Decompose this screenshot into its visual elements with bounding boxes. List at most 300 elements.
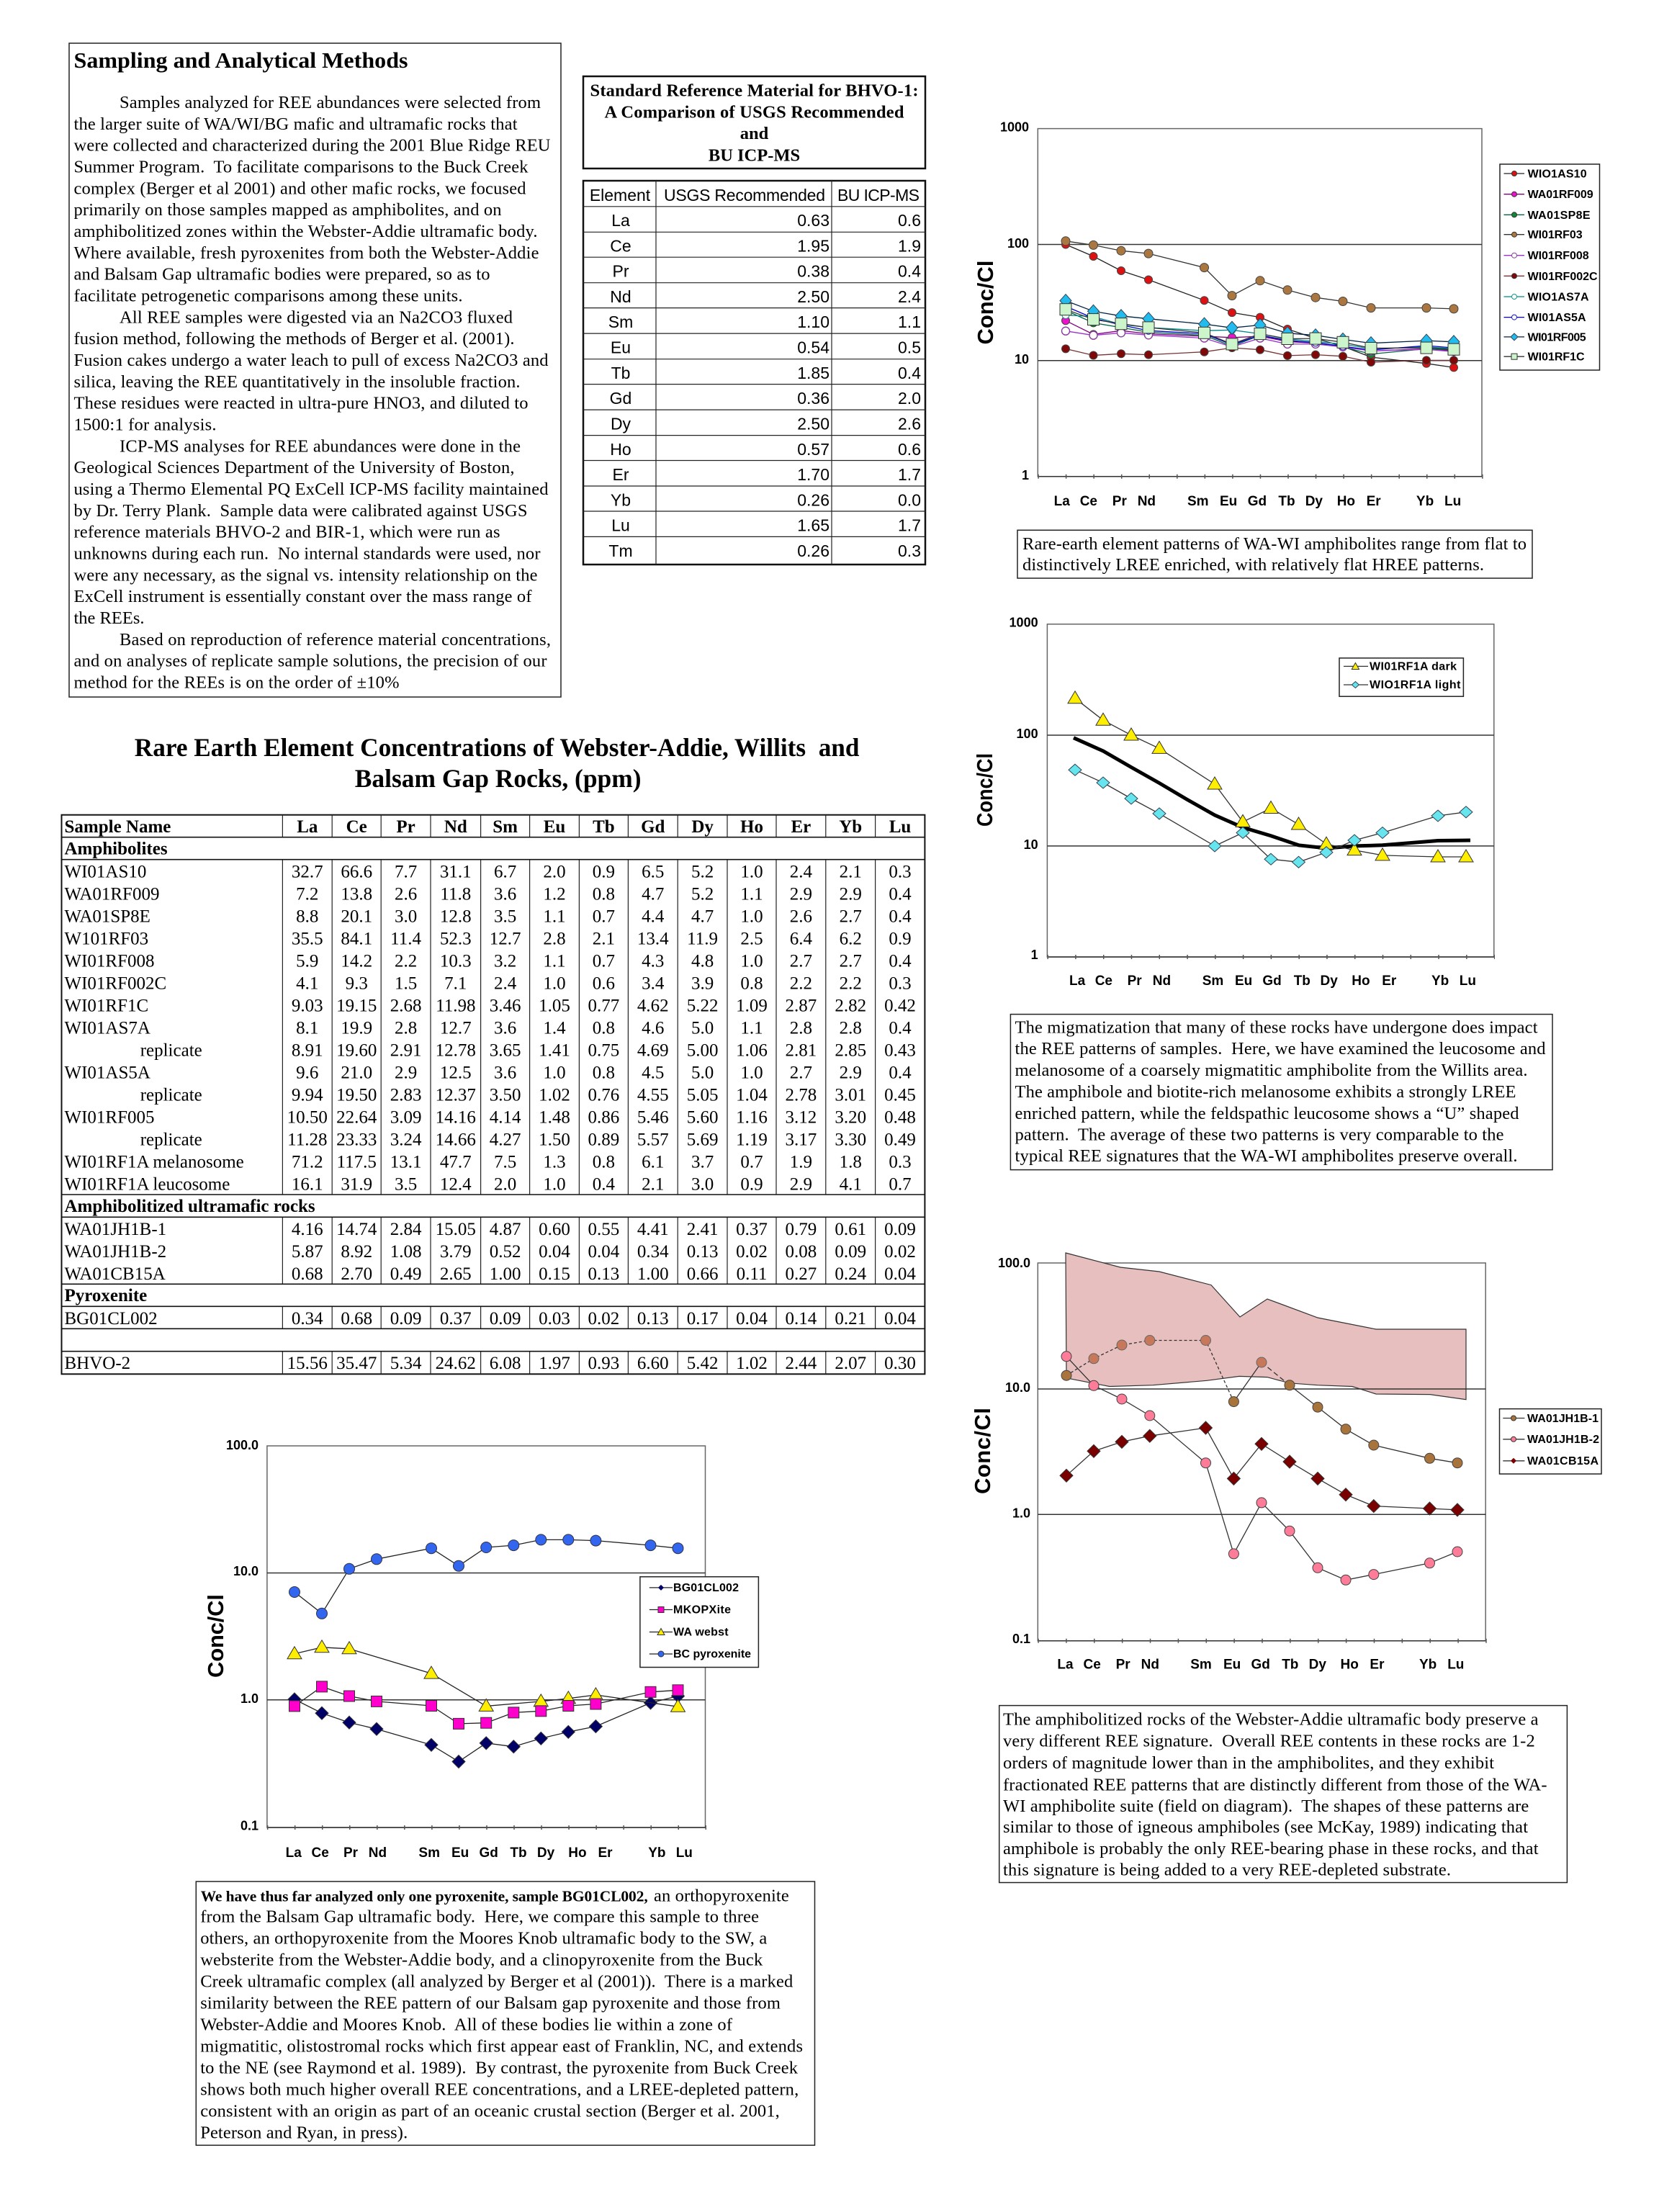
legend: pyroxenite samples: BG01CL002 bbox=[673, 1582, 739, 1594]
section: amphibolites: WI01RF1A melanosome bbox=[65, 1152, 244, 1172]
text block: methods description: Where available, fresh pyroxenites from both the Webster-Addie bbox=[73, 243, 539, 263]
section: amphibolites: 2.9 bbox=[840, 1063, 862, 1082]
section: amphibolitized ultramafic rocks: 0.55 bbox=[588, 1220, 619, 1239]
section: amphibolites: 0.76 bbox=[588, 1085, 619, 1105]
x axis element labels: Pr bbox=[1116, 1658, 1130, 1672]
section: amphibolites: WI01AS5A bbox=[65, 1063, 150, 1082]
y axis values: 1.0 bbox=[240, 1691, 258, 1706]
section: amphibolitized ultramafic rocks: 0.04 bbox=[588, 1242, 620, 1262]
text block: methods description: and Balsam Gap ultramafic bodies were prepared, so as to bbox=[73, 265, 490, 284]
section: amphibolitized ultramafic rocks: 0.13 bbox=[687, 1242, 718, 1262]
text block: methods description bbox=[73, 93, 551, 692]
section: amphibolites: replicate bbox=[140, 1085, 202, 1105]
series: BG01CL002 bbox=[295, 1696, 678, 1761]
section: amphibolites: 5.9 bbox=[296, 951, 318, 971]
section: amphibolites: 3.50 bbox=[490, 1085, 521, 1105]
section: amphibolites: 5.57 bbox=[637, 1130, 669, 1149]
section: amphibolites: 5.2 bbox=[691, 862, 714, 881]
heading: sampling and analytical methods: Sampling and Analytical Methods bbox=[73, 48, 408, 73]
section: amphibolites: replicate bbox=[140, 1130, 202, 1149]
section: amphibolites: 0.45 bbox=[884, 1085, 916, 1105]
section: amphibolites: 4.55 bbox=[637, 1085, 669, 1105]
section: amphibolites: 7.5 bbox=[494, 1152, 516, 1172]
section: amphibolites: 3.2 bbox=[494, 951, 516, 971]
series: WA01JH1B-2 bbox=[1066, 1357, 1457, 1580]
table: USGS recommended vs BU ICP-MS: 1.65 bbox=[797, 516, 830, 534]
section: amphibolites: 0.4 bbox=[889, 1018, 912, 1038]
caption: migmatization effect: typical REE signatures that the WA-WI amphibolites preserve overall. bbox=[1015, 1146, 1518, 1166]
section: amphibolites: 2.0 bbox=[494, 1174, 516, 1194]
section: amphibolitized ultramafic rocks: 0.02 bbox=[736, 1242, 768, 1262]
table: USGS recommended vs BU ICP-MS: 2.50 bbox=[797, 415, 830, 433]
section: amphibolites: 2.9 bbox=[840, 884, 862, 904]
section: amphibolites: 5.05 bbox=[687, 1085, 718, 1105]
section: amphibolitized ultramafic rocks bbox=[65, 1197, 916, 1284]
section: amphibolites: 0.4 bbox=[889, 951, 912, 971]
section: amphibolites: 14.2 bbox=[341, 951, 372, 971]
section: amphibolites: 3.5 bbox=[395, 1174, 417, 1194]
x axis element labels: Ce bbox=[311, 1845, 329, 1861]
text block: methods description: fusion method, following the methods of Berger et al. (2001). bbox=[73, 329, 514, 349]
section: pyroxenite: 0.04 bbox=[884, 1309, 916, 1328]
section: amphibolitized ultramafic rocks: 8.92 bbox=[341, 1242, 372, 1262]
x axis element labels: Er bbox=[598, 1845, 613, 1861]
table: USGS recommended vs BU ICP-MS: Dy bbox=[611, 415, 631, 433]
section: amphibolitized ultramafic rocks: 0.09 bbox=[884, 1220, 916, 1239]
chart: migmatite melanosome and leucosome bbox=[972, 615, 1495, 989]
x axis element labels: Gd bbox=[1248, 494, 1267, 509]
text block: methods description: were collected and characterized during the 2001 Blue Ridge REU bbox=[73, 136, 551, 156]
section: amphibolites: 13.4 bbox=[637, 929, 669, 948]
table: USGS recommended vs BU ICP-MS: 1.70 bbox=[797, 465, 830, 484]
section: amphibolites: 0.7 bbox=[740, 1152, 763, 1172]
x axis element labels: Lu bbox=[1447, 1658, 1464, 1672]
section: pyroxenite: 0.13 bbox=[637, 1309, 669, 1328]
section: amphibolites: 32.7 bbox=[292, 862, 323, 881]
section: amphibolites: 0.8 bbox=[593, 1063, 615, 1082]
section: amphibolites: 66.6 bbox=[341, 862, 372, 881]
section: amphibolites: 2.85 bbox=[835, 1040, 866, 1060]
section: amphibolites: 0.43 bbox=[884, 1040, 916, 1060]
section: amphibolites: 2.91 bbox=[390, 1040, 421, 1060]
table: USGS recommended vs BU ICP-MS: Tm bbox=[608, 541, 633, 560]
section: amphibolites: 3.7 bbox=[691, 1152, 714, 1172]
section: amphibolites: 5.2 bbox=[691, 884, 714, 904]
x axis element labels: Ho bbox=[1337, 494, 1355, 509]
section: amphibolites: 19.60 bbox=[336, 1040, 377, 1060]
text block: methods description: and on analyses of replicate sample solutions, the precision of our bbox=[73, 652, 547, 671]
table: USGS recommended vs BU ICP-MS: BU ICP-MS bbox=[837, 186, 920, 204]
caption: pyroxenite analysis: Webster-Addie and Moores Knob. All of these bodies lie within a zone of bbox=[200, 2015, 733, 2034]
text block: methods description: complex (Berger et al 2001) and other mafic rocks, we focused bbox=[73, 179, 526, 198]
caption: pyroxenite analysis: others, an orthopyroxenite from the Moores Knob ultramafic body to the SW, a bbox=[200, 1928, 767, 1948]
table: USGS recommended vs BU ICP-MS: 2.6 bbox=[898, 415, 921, 433]
text block: methods description: Fusion cakes undergo a water leach to pull of excess Na2CO3 and bbox=[73, 351, 549, 370]
x axis element labels: Ho bbox=[568, 1845, 587, 1861]
section: amphibolites: 0.86 bbox=[588, 1107, 619, 1127]
section: pyroxenite bbox=[65, 1286, 916, 1328]
x axis element labels: Lu bbox=[1460, 974, 1476, 989]
y axis values: 10.0 bbox=[1005, 1380, 1030, 1395]
y axis label: Conc/Cl bbox=[970, 1408, 995, 1494]
section: amphibolites: 4.3 bbox=[642, 951, 664, 971]
section: pyroxenite: 0.34 bbox=[292, 1309, 323, 1328]
table: USGS recommended vs BU ICP-MS: 0.6 bbox=[898, 211, 921, 230]
caption: pyroxenite analysis: We have thus far analyzed only one pyroxenite, sample BG01CL002, bbox=[201, 1887, 648, 1905]
section: amphibolites: 4.62 bbox=[637, 996, 669, 1015]
section: amphibolites: 1.0 bbox=[543, 974, 566, 993]
table: USGS recommended vs BU ICP-MS: 0.0 bbox=[898, 491, 921, 510]
section: amphibolites: 0.7 bbox=[889, 1174, 912, 1194]
section: amphibolites: 2.1 bbox=[593, 929, 615, 948]
legend: amphibolite samples: WI01RF005 bbox=[1528, 331, 1586, 344]
section: amphibolites: 2.83 bbox=[390, 1085, 421, 1105]
legend: amphibolite samples: WIO1AS10 bbox=[1528, 168, 1587, 180]
section: amphibolites: 13.8 bbox=[341, 884, 372, 904]
table header row: Lu bbox=[889, 817, 911, 837]
section: amphibolites: 0.7 bbox=[593, 907, 615, 926]
caption: pyroxenite analysis: consistent with an origin as part of an oceanic crustal section (Berger et al. 2001, bbox=[200, 2101, 780, 2121]
section: amphibolites: 0.9 bbox=[740, 1174, 763, 1194]
section: amphibolitized ultramafic rocks: 2.65 bbox=[440, 1264, 472, 1284]
y axis values: 1000 bbox=[1010, 615, 1038, 629]
section: amphibolitized ultramafic rocks: Amphibolitized ultramafic rocks bbox=[65, 1197, 315, 1216]
section: amphibolitized ultramafic rocks: 0.09 bbox=[835, 1242, 866, 1262]
section: amphibolites: 1.06 bbox=[736, 1040, 768, 1060]
section: amphibolitized ultramafic rocks: 0.52 bbox=[490, 1242, 521, 1262]
section: amphibolites: 1.50 bbox=[539, 1130, 570, 1149]
row: BHVO-2 standard: 1.02 bbox=[736, 1354, 768, 1373]
caption: amphibolitized rocks bbox=[999, 1706, 1567, 1882]
section: amphibolites: WI01RF002C bbox=[65, 974, 166, 993]
row: BHVO-2 standard: BHVO-2 bbox=[65, 1354, 130, 1373]
panel: standard reference material title: and bbox=[740, 124, 769, 143]
x axis element labels: Sm bbox=[1202, 974, 1223, 989]
section: amphibolites: 12.7 bbox=[440, 1018, 472, 1038]
section: amphibolites: 1.1 bbox=[543, 951, 566, 971]
y axis values: 0.1 bbox=[240, 1819, 258, 1833]
section: amphibolites: 5.0 bbox=[691, 1018, 714, 1038]
table: USGS recommended vs BU ICP-MS: Tb bbox=[611, 364, 630, 382]
section: amphibolites: 19.50 bbox=[336, 1085, 377, 1105]
section: amphibolites: 7.2 bbox=[296, 884, 318, 904]
section: amphibolites: 10.50 bbox=[287, 1107, 328, 1127]
section: amphibolites: 11.8 bbox=[440, 884, 471, 904]
section: amphibolites: 1.0 bbox=[740, 862, 763, 881]
table: USGS recommended vs BU ICP-MS: La bbox=[611, 211, 630, 230]
series: WA01CB15A bbox=[1066, 1428, 1457, 1510]
section: amphibolites: 2.82 bbox=[835, 996, 866, 1015]
section: amphibolites: 3.5 bbox=[494, 907, 516, 926]
section: amphibolites: replicate bbox=[140, 1040, 202, 1060]
section: amphibolites: 3.65 bbox=[490, 1040, 521, 1060]
section: amphibolites: 0.4 bbox=[889, 1063, 912, 1082]
section: amphibolites: 16.1 bbox=[292, 1174, 323, 1194]
section: amphibolites: 6.5 bbox=[642, 862, 664, 881]
series: WI01AS7A bbox=[1066, 315, 1454, 349]
table: USGS recommended vs BU ICP-MS: 1.1 bbox=[898, 313, 921, 331]
legend: amphibolite samples: WI01RF008 bbox=[1528, 250, 1589, 262]
section: amphibolites: WI01RF005 bbox=[65, 1107, 154, 1127]
section: amphibolites: 117.5 bbox=[337, 1152, 377, 1172]
row: BHVO-2 standard: 15.56 bbox=[287, 1354, 328, 1373]
x axis element labels: Lu bbox=[1444, 494, 1461, 509]
x axis element labels: Ce bbox=[1095, 974, 1112, 989]
section: amphibolites: 11.4 bbox=[390, 929, 422, 948]
text block: methods description: Samples analyzed for REE abundances were selected from bbox=[120, 93, 541, 112]
section: amphibolites: 12.37 bbox=[436, 1085, 476, 1105]
section: amphibolites: Amphibolites bbox=[65, 840, 168, 859]
section: amphibolites: 1.41 bbox=[539, 1040, 570, 1060]
section: amphibolites: 8.1 bbox=[296, 1018, 318, 1038]
section: amphibolites: 1.0 bbox=[740, 951, 763, 971]
section: amphibolites: 6.4 bbox=[790, 929, 813, 948]
text block: methods description: using a Thermo Elemental PQ ExCell ICP-MS facility maintained bbox=[73, 480, 549, 499]
table: USGS recommended vs BU ICP-MS: Eu bbox=[611, 338, 631, 357]
panel: standard reference material title: A Comparison of USGS Recommended bbox=[605, 103, 904, 122]
x axis element labels: Er bbox=[1382, 974, 1397, 989]
section: amphibolites: 1.8 bbox=[840, 1152, 862, 1172]
x axis element labels: Eu bbox=[451, 1845, 469, 1861]
legend: amphibolitized samples: WA01CB15A bbox=[1527, 1455, 1599, 1467]
section: amphibolites: 12.8 bbox=[440, 907, 472, 926]
section: amphibolitized ultramafic rocks: 0.68 bbox=[292, 1264, 323, 1284]
section: amphibolites: 31.9 bbox=[341, 1174, 372, 1194]
section: amphibolitized ultramafic rocks: 0.04 bbox=[539, 1242, 570, 1262]
caption: amphibolitized rocks: orders of magnitude lower than in the amphibolites, and they exhibit bbox=[1003, 1753, 1494, 1773]
section: amphibolites: WI01AS10 bbox=[65, 862, 146, 881]
y axis values: 1000 bbox=[1000, 120, 1029, 134]
table: USGS recommended vs BU ICP-MS: 1.10 bbox=[797, 313, 830, 331]
x axis element labels: Gd bbox=[1251, 1658, 1270, 1672]
section: pyroxenite: 0.21 bbox=[835, 1309, 866, 1328]
caption: pyroxenite analysis: Peterson and Ryan, in press). bbox=[200, 2123, 408, 2142]
y axis values: 100 bbox=[1017, 727, 1038, 741]
y axis values: 10 bbox=[1015, 352, 1029, 367]
table: USGS recommended vs BU ICP-MS: Gd bbox=[610, 389, 631, 408]
section: amphibolites: 5.69 bbox=[687, 1130, 718, 1149]
caption: pyroxenite analysis: Creek ultramafic complex (all analyzed by Berger et al (2001)). There is a marked bbox=[200, 1972, 793, 1991]
section: amphibolites: 0.8 bbox=[593, 1152, 615, 1172]
table: USGS recommended vs BU ICP-MS: 0.6 bbox=[898, 440, 921, 459]
table: USGS recommended vs BU ICP-MS: Pr bbox=[612, 262, 629, 281]
section: amphibolites: 12.78 bbox=[436, 1040, 476, 1060]
row: BHVO-2 standard: 5.42 bbox=[687, 1354, 718, 1373]
section: amphibolitized ultramafic rocks: WA01JH1B-2 bbox=[65, 1242, 166, 1262]
caption: pyroxenite analysis bbox=[196, 1881, 815, 2145]
section: amphibolites: 2.2 bbox=[840, 974, 862, 993]
series: WI01RF002C bbox=[1066, 348, 1454, 362]
table header row: Yb bbox=[839, 817, 862, 837]
section: amphibolites: 2.78 bbox=[786, 1085, 817, 1105]
section: amphibolitized ultramafic rocks: 15.05 bbox=[436, 1220, 476, 1239]
table: USGS recommended vs BU ICP-MS: 0.38 bbox=[797, 262, 830, 281]
section: amphibolites: 84.1 bbox=[341, 929, 372, 948]
table: USGS recommended vs BU ICP-MS: 1.7 bbox=[898, 465, 921, 484]
legend: pyroxenite samples: WA webst bbox=[673, 1626, 729, 1639]
section: amphibolites: 0.48 bbox=[884, 1107, 916, 1127]
section: amphibolites: 6.2 bbox=[840, 929, 862, 948]
y axis values bbox=[226, 1438, 258, 1833]
chart: pyroxenite comparison bbox=[203, 1438, 758, 1861]
y axis values: 1 bbox=[1031, 948, 1038, 962]
section: amphibolitized ultramafic rocks: 5.87 bbox=[292, 1242, 323, 1262]
row: BHVO-2 standard: 35.47 bbox=[336, 1354, 377, 1373]
text block: methods description: the larger suite of WA/WI/BG mafic and ultramafic rocks that bbox=[73, 114, 518, 134]
section: amphibolites: 9.03 bbox=[292, 996, 323, 1015]
text block: methods description: method for the REEs is on the order of ±10% bbox=[73, 673, 399, 692]
section: amphibolites: 0.3 bbox=[889, 1152, 912, 1172]
section: amphibolitized ultramafic rocks: 0.49 bbox=[390, 1264, 421, 1284]
text block: methods description: amphibolitized zones within the Webster-Addie ultramafic body. bbox=[73, 222, 537, 241]
x axis element labels: Ce bbox=[1083, 1658, 1101, 1672]
section: amphibolites: WI01RF008 bbox=[65, 951, 154, 971]
table header row: Eu bbox=[544, 817, 565, 837]
section: amphibolites: 2.9 bbox=[790, 884, 812, 904]
section: amphibolites: 11.9 bbox=[687, 929, 718, 948]
section: amphibolites: 1.0 bbox=[543, 1174, 566, 1194]
section: amphibolitized ultramafic rocks: 0.34 bbox=[637, 1242, 669, 1262]
section: amphibolitized ultramafic rocks: 14.74 bbox=[336, 1220, 377, 1239]
section: amphibolites: 0.9 bbox=[593, 862, 615, 881]
section: amphibolites: 5.0 bbox=[691, 1063, 714, 1082]
x axis element labels: Tb bbox=[510, 1845, 527, 1861]
section: amphibolites: 3.12 bbox=[786, 1107, 817, 1127]
section: amphibolitized ultramafic rocks: 2.84 bbox=[390, 1220, 422, 1239]
section: amphibolites: 3.46 bbox=[490, 996, 521, 1015]
section: amphibolites: 0.4 bbox=[889, 907, 912, 926]
series: WA01SP8E bbox=[1066, 310, 1454, 354]
section: amphibolites: 2.4 bbox=[790, 862, 813, 881]
section: amphibolites: 0.4 bbox=[593, 1174, 616, 1194]
section: amphibolites: 8.91 bbox=[292, 1040, 323, 1060]
section: amphibolites: 2.0 bbox=[543, 862, 566, 881]
section: amphibolites: 6.1 bbox=[642, 1152, 664, 1172]
section: amphibolites: 4.69 bbox=[637, 1040, 669, 1060]
text block: methods description: unknowns during each run. No internal standards were used, nor bbox=[73, 544, 540, 563]
section: amphibolites: 1.0 bbox=[740, 907, 763, 926]
caption: pyroxenite analysis: websterite from the Webster-Addie body, and a clinopyroxenite from the Buck bbox=[200, 1950, 763, 1969]
section: amphibolites: 3.24 bbox=[390, 1130, 422, 1149]
series: WA webst bbox=[295, 1647, 678, 1707]
y axis values: 10 bbox=[1024, 837, 1038, 852]
section: amphibolites: 3.6 bbox=[494, 884, 516, 904]
y axis values bbox=[1010, 615, 1038, 962]
text block: methods description: the REEs. bbox=[73, 608, 144, 628]
row: BHVO-2 standard: 5.34 bbox=[390, 1354, 422, 1373]
table: USGS recommended vs BU ICP-MS: Lu bbox=[611, 516, 630, 534]
section: amphibolites: 2.81 bbox=[786, 1040, 817, 1060]
x axis element labels: Dy bbox=[1305, 494, 1323, 509]
section: amphibolites: 47.7 bbox=[440, 1152, 472, 1172]
legend: amphibolite samples: WA01SP8E bbox=[1528, 210, 1591, 222]
legend: amphibolite samples bbox=[1500, 164, 1600, 370]
section: amphibolites: WI01AS7A bbox=[65, 1018, 150, 1038]
text block: methods description: Geological Sciences Department of the University of Boston, bbox=[73, 458, 514, 477]
section: amphibolites: 4.27 bbox=[490, 1130, 521, 1149]
section: amphibolites: 1.02 bbox=[539, 1085, 570, 1105]
x axis element labels: Pr bbox=[343, 1845, 359, 1861]
legend: pyroxenite samples: BC pyroxenite bbox=[673, 1648, 751, 1660]
table: USGS recommended vs BU ICP-MS: 1.9 bbox=[898, 236, 921, 255]
section: amphibolites: 52.3 bbox=[440, 929, 472, 948]
x axis element labels: Yb bbox=[648, 1845, 665, 1861]
x axis element labels: Ho bbox=[1352, 974, 1370, 989]
section: amphibolitized ultramafic rocks: 0.11 bbox=[737, 1264, 767, 1284]
table: USGS recommended vs BU ICP-MS: Ce bbox=[610, 236, 631, 255]
x axis element labels: Er bbox=[1367, 494, 1381, 509]
section: amphibolites: 11.98 bbox=[436, 996, 475, 1015]
x axis element labels: Dy bbox=[537, 1845, 555, 1861]
section: amphibolitized ultramafic rocks: 0.61 bbox=[835, 1220, 866, 1239]
chart: WA-WI amphibolite REE patterns bbox=[973, 120, 1600, 509]
section: amphibolites: 1.09 bbox=[736, 996, 768, 1015]
text block: methods description: were any necessary, as the signal vs. intensity relationship on the bbox=[73, 565, 538, 585]
table: USGS recommended vs BU ICP-MS: 0.57 bbox=[797, 440, 830, 459]
section: amphibolites: 2.8 bbox=[543, 929, 566, 948]
section: amphibolites: 2.8 bbox=[395, 1018, 417, 1038]
x axis element labels: Pr bbox=[1112, 494, 1127, 509]
legend: amphibolite samples: WIO1AS7A bbox=[1528, 291, 1589, 304]
section: amphibolites: 11.28 bbox=[287, 1130, 327, 1149]
series: WA01RF009 bbox=[1066, 320, 1454, 351]
section: amphibolites: 1.0 bbox=[740, 1063, 763, 1082]
section: amphibolites: 3.6 bbox=[494, 1063, 516, 1082]
x axis element labels: Lu bbox=[676, 1845, 693, 1861]
caption: migmatization effect: enriched pattern, while the feldspathic leucosome shows a “U” shaped bbox=[1015, 1104, 1519, 1123]
section: amphibolites: 2.8 bbox=[840, 1018, 862, 1038]
section: amphibolites: 12.4 bbox=[440, 1174, 472, 1194]
section: amphibolites: 14.16 bbox=[436, 1107, 476, 1127]
section: amphibolites: 2.1 bbox=[840, 862, 862, 881]
section: amphibolites: 9.3 bbox=[346, 974, 368, 993]
section: amphibolites: 3.17 bbox=[786, 1130, 817, 1149]
row: BHVO-2 standard: 24.62 bbox=[436, 1354, 476, 1373]
section: amphibolites: 2.87 bbox=[786, 996, 817, 1015]
section: amphibolites: 3.01 bbox=[835, 1085, 866, 1105]
section: pyroxenite: 0.17 bbox=[687, 1309, 718, 1328]
section: amphibolites: 8.8 bbox=[296, 907, 318, 926]
table header row: Ce bbox=[346, 817, 367, 837]
section: amphibolitized ultramafic rocks: 0.02 bbox=[884, 1242, 916, 1262]
table: USGS recommended vs BU ICP-MS: 0.4 bbox=[898, 364, 921, 382]
section: pyroxenite: 0.37 bbox=[440, 1309, 472, 1328]
legend: pyroxenite samples bbox=[640, 1577, 758, 1668]
table: USGS recommended vs BU ICP-MS: 0.3 bbox=[898, 541, 921, 560]
section: amphibolites: 2.4 bbox=[494, 974, 517, 993]
series: WI01AS5A bbox=[1066, 306, 1454, 350]
field: amphibolite suite bbox=[1066, 1253, 1466, 1400]
x axis element labels: La bbox=[1054, 494, 1070, 509]
section: amphibolites: 14.66 bbox=[436, 1130, 476, 1149]
section: amphibolites: 4.7 bbox=[691, 907, 714, 926]
section: pyroxenite: Pyroxenite bbox=[65, 1286, 147, 1305]
section: amphibolites: 13.1 bbox=[390, 1152, 421, 1172]
caption: migmatization effect: the REE patterns of samples. Here, we have examined the leucosome and bbox=[1015, 1039, 1545, 1058]
section: amphibolites: 1.3 bbox=[543, 1152, 566, 1172]
section: amphibolitized ultramafic rocks: 0.37 bbox=[736, 1220, 768, 1239]
x axis element labels: Nd bbox=[1138, 494, 1156, 509]
section: amphibolites: 1.1 bbox=[740, 1018, 763, 1038]
x axis element labels: Yb bbox=[1416, 494, 1434, 509]
section: amphibolites: 2.8 bbox=[790, 1018, 812, 1038]
table: USGS recommended vs BU ICP-MS: 1.95 bbox=[797, 236, 830, 255]
section: amphibolites: 1.0 bbox=[543, 1063, 566, 1082]
series: WI01RF008 bbox=[1066, 331, 1454, 351]
section: amphibolites: WI01RF1C bbox=[65, 996, 148, 1015]
section: amphibolitized ultramafic rocks: 2.70 bbox=[341, 1264, 372, 1284]
table: USGS recommended vs BU ICP-MS bbox=[583, 181, 925, 565]
